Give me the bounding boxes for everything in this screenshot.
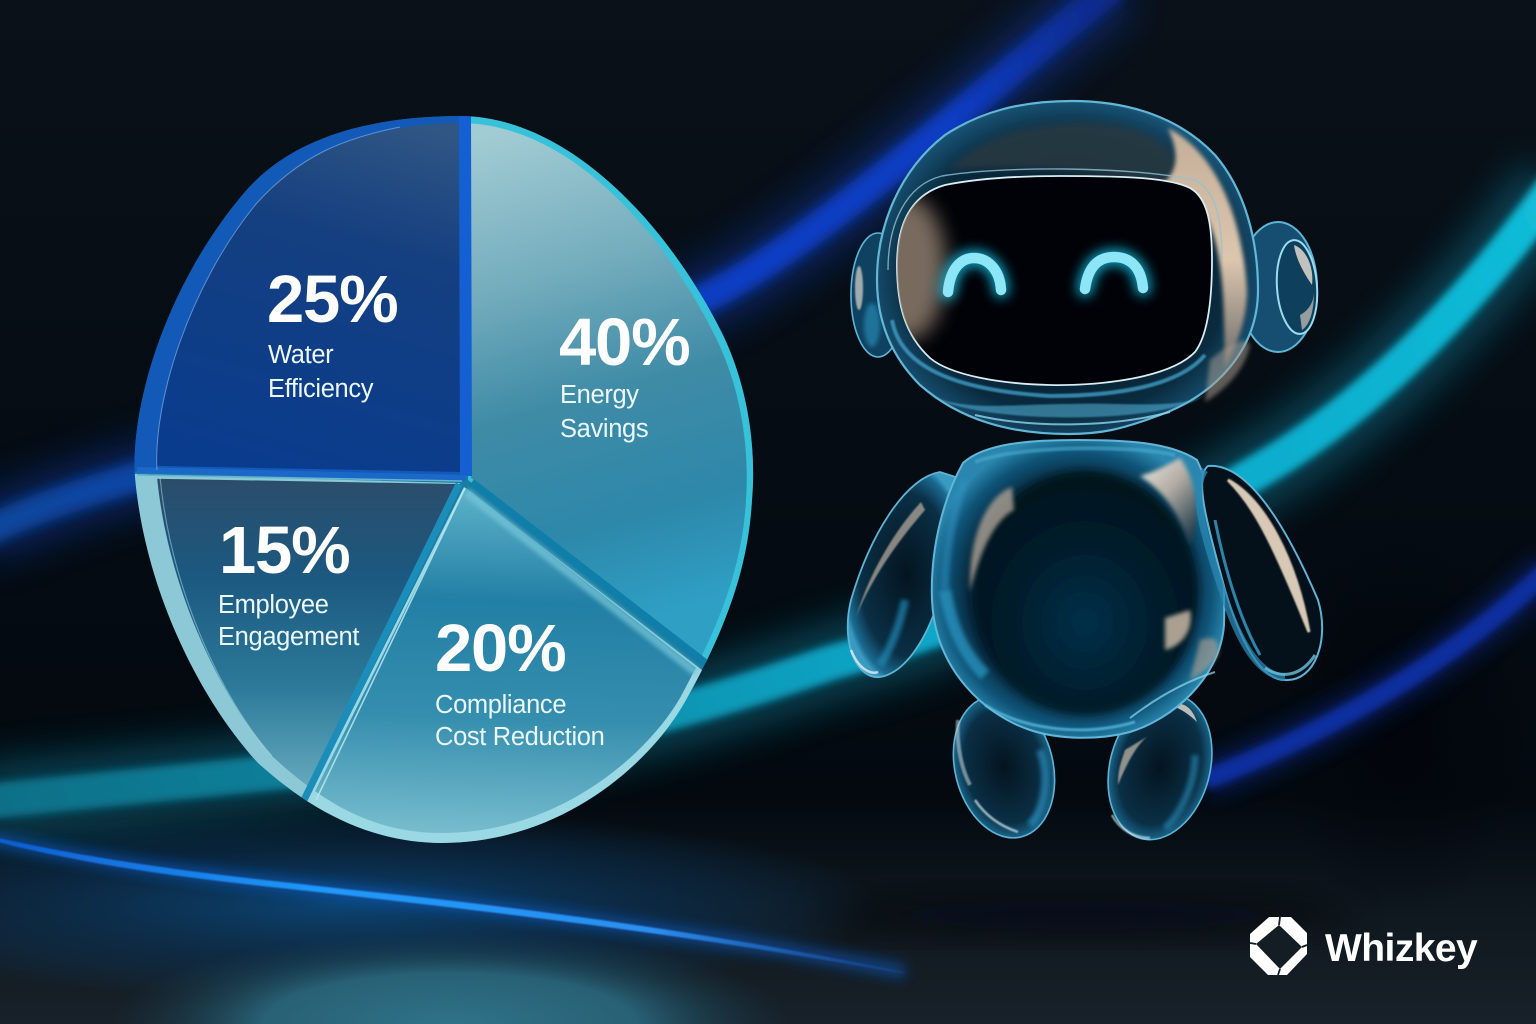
label: employee engagement 15%: Engagement xyxy=(218,623,359,651)
helmet neck ring xyxy=(930,395,1205,418)
light stream: cyan xyxy=(0,185,1536,802)
logo: Whizkey xyxy=(1250,917,1478,975)
label: water efficiency 25%: 25% xyxy=(267,262,398,337)
helmet dome reflection xyxy=(950,122,1176,190)
robot body highlights xyxy=(945,448,1218,730)
robot helmet xyxy=(877,101,1258,434)
label: energy savings 40%: Energy xyxy=(560,381,639,409)
robot right arm xyxy=(1199,466,1322,680)
robot left leg xyxy=(939,685,1069,849)
robot left arm xyxy=(848,472,965,677)
robot mascot xyxy=(848,101,1322,851)
label: water efficiency 25% xyxy=(267,262,398,403)
label: compliance cost reduction 20%: Cost Reduction xyxy=(435,723,604,751)
light line: floor xyxy=(0,836,905,974)
label: energy savings 40% xyxy=(559,305,690,443)
light stream: blue xyxy=(0,0,1115,535)
label: compliance cost reduction 20%: 20% xyxy=(435,611,566,686)
robot visor xyxy=(870,169,1222,396)
robot right eye xyxy=(1085,257,1143,289)
label: energy savings 40%: 40% xyxy=(559,305,690,380)
label: compliance cost reduction 20%: Compliance xyxy=(435,691,566,719)
label: employee engagement 15% xyxy=(218,513,359,651)
robot left eye xyxy=(948,258,1001,292)
robot left ear xyxy=(851,233,905,357)
logo wordmark: Whizkey xyxy=(1325,927,1478,970)
robot body inner sphere xyxy=(972,471,1198,715)
label: water efficiency 25%: Water xyxy=(268,341,334,369)
label: employee engagement 15%: Employee xyxy=(218,591,329,619)
robot body xyxy=(932,440,1224,738)
slice rims xyxy=(134,116,754,843)
pie chart xyxy=(134,116,754,843)
slice: water efficiency xyxy=(156,123,460,472)
logo mark xyxy=(1250,917,1307,975)
label: compliance cost reduction 20% xyxy=(435,611,604,751)
slice: energy savings xyxy=(471,124,747,656)
label: energy savings 40%: Savings xyxy=(560,415,648,443)
label: employee engagement 15%: 15% xyxy=(219,513,350,588)
light stream: lower right blue xyxy=(1205,568,1536,780)
label: water efficiency 25%: Efficiency xyxy=(268,375,374,403)
robot right ear xyxy=(1239,222,1320,352)
slice edges xyxy=(137,116,706,800)
robot floor shadow xyxy=(815,899,1355,931)
helmet beige reflection xyxy=(1162,128,1247,368)
slice: employee engagement xyxy=(157,478,455,786)
robot right leg xyxy=(1093,683,1227,851)
slice: compliance cost reduction xyxy=(315,488,696,833)
